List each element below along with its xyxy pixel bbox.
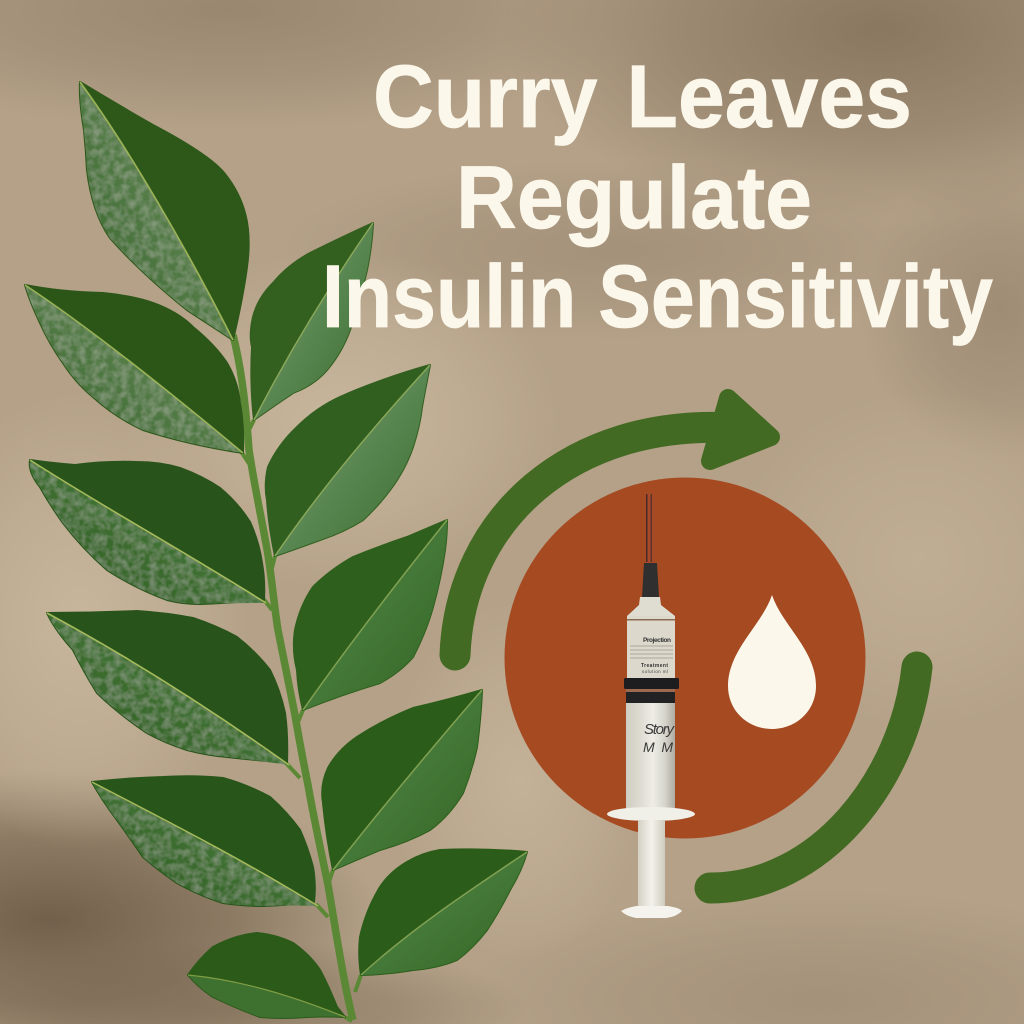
plunger <box>638 820 665 908</box>
leaf 3 <box>251 223 373 420</box>
icon: blood drop <box>728 595 816 729</box>
leaf 9 <box>92 776 318 906</box>
leaf 6 <box>294 520 447 710</box>
label on barrel: Projection <box>643 637 671 644</box>
leaf 10 <box>359 849 527 975</box>
arrow: upper cycle arc <box>455 398 771 655</box>
icon: syringe <box>607 494 695 918</box>
label on barrel <box>627 616 675 679</box>
needle hub <box>642 563 659 597</box>
plant: curry leaf branch <box>25 82 527 1021</box>
barrel: M M <box>643 739 673 755</box>
title: Curry Leaves <box>373 46 912 146</box>
black collar <box>624 678 679 703</box>
circle: rust background <box>504 478 866 838</box>
label on barrel: solution ml <box>642 669 668 674</box>
needle <box>646 494 652 564</box>
barrel <box>626 703 676 809</box>
barrel: Story <box>644 721 676 738</box>
title: Regulate <box>456 147 812 247</box>
arrow: lower cycle arc <box>710 667 917 888</box>
leaf 5 <box>30 460 266 604</box>
leaf 11 <box>188 933 345 1018</box>
flange <box>607 807 695 821</box>
title <box>322 46 993 346</box>
leaf 8 <box>322 690 482 870</box>
shoulder <box>627 597 675 622</box>
leaf 1 <box>80 82 249 340</box>
leaf 4 <box>266 365 430 556</box>
label on barrel: Treatment <box>641 663 668 669</box>
leaf 7 <box>47 611 289 765</box>
leaf 2 <box>25 285 243 453</box>
thumb rest <box>621 906 682 918</box>
stem with petioles <box>233 335 361 1021</box>
